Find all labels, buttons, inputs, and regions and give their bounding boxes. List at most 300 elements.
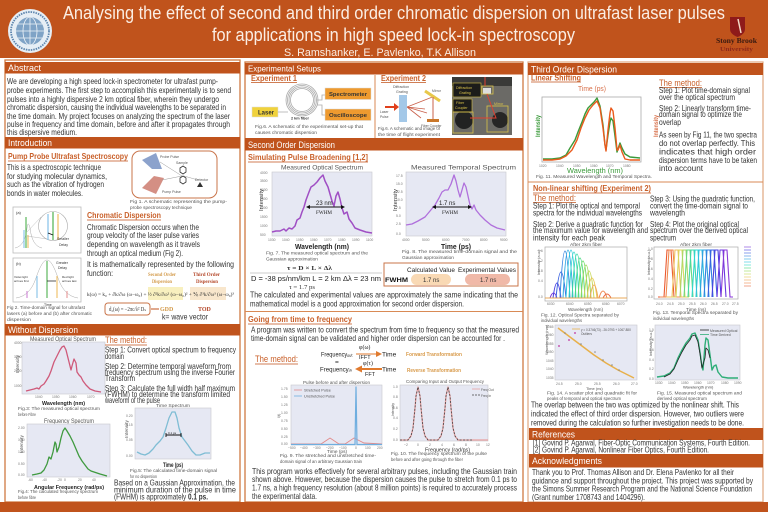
pump probe text: This is a spectroscopic technique xyxy=(7,163,101,172)
figure 9: pulse before and after dispersion: 0.50 xyxy=(281,427,288,431)
gaussian approximation text xyxy=(114,478,236,502)
panel: middle column xyxy=(245,62,523,502)
heading: acknowledgments: Acknowledgments xyxy=(532,456,602,467)
figure 13: temporal spectra per wavelength: 0.4 xyxy=(648,277,653,281)
figure 3 caption xyxy=(18,406,100,418)
figure 2b: greater delay: Violet light xyxy=(14,275,28,279)
figure 2 caption: lasers (a) before and (b) after chromatic xyxy=(7,311,93,317)
panel: right column xyxy=(528,62,763,502)
figure 7 caption: Gaussian approximation xyxy=(266,256,318,262)
figure 8: temporal spectrum with FWHM: 5000 xyxy=(422,238,430,242)
caption: Fig.6. A schematic of the experimental set-up that xyxy=(255,124,364,130)
figure 8 caption xyxy=(402,249,517,261)
figure 10: comparing input and output frequency: Freq In xyxy=(481,394,491,398)
figure 7: optical spectrum with FWHM: 1040 xyxy=(282,238,290,242)
figure 13 caption xyxy=(653,310,739,322)
subheading: non-linear shifting: Non-linear shifting (Experiment 2) xyxy=(533,184,651,193)
linear shifting steps: domain signal to optimize the xyxy=(659,110,742,119)
abstract text: pulse in frequency and time domain, before and after it propagates through xyxy=(7,120,230,129)
figure 11: wavelength and temporal spectra: 1020 xyxy=(539,164,547,168)
figure 4: frequency spectrum: 0.50 xyxy=(18,462,25,466)
figure 8: temporal spectrum with FWHM: FWHM xyxy=(442,210,458,216)
experiment 2 diagram: Diffraction xyxy=(393,85,409,89)
figure 13: temporal spectra per wavelength: 26.0 xyxy=(700,302,707,306)
experiment 2 diagram: Grating xyxy=(396,90,408,94)
experiment 2 diagram: Fiber Coupler xyxy=(421,124,442,128)
figure 11: wavelength and temporal spectra: Time (ps) xyxy=(578,86,606,93)
pump probe text xyxy=(7,163,107,198)
figure 8: temporal spectrum with FWHM: 6000 xyxy=(442,238,450,242)
figure 14: quadratic fit: 1040 xyxy=(546,367,554,371)
figure 2b: greater delay: Greater xyxy=(56,261,69,265)
figure 12: optical spectra per wavelength: 6070 xyxy=(617,302,625,306)
figure 15: measured and derived spectrum: Time Derived xyxy=(710,333,731,337)
figure 9: pulse before and after dispersion: Pulse before and after dispersion xyxy=(303,380,370,386)
figure 14: quadratic fit: 1060 xyxy=(546,333,554,337)
figure 5: time spectrum: 0.00 xyxy=(126,454,133,458)
acknowledgments text xyxy=(532,468,754,502)
experimental pill: 1.7 ns xyxy=(480,278,496,284)
transformation diagram: Time xyxy=(382,366,397,374)
figure 13: temporal spectra per wavelength: 27.0 xyxy=(722,302,729,306)
non-linear steps right: spectrum over the derived optical xyxy=(650,226,748,235)
figure 1 caption: Fig 1. A schematic representing the pump- xyxy=(130,199,227,205)
the method heading: The method: xyxy=(533,193,576,204)
heading: references: References xyxy=(532,430,575,440)
figure 3: measured optical spectrum: 2000 xyxy=(14,369,22,373)
transformation diagram: Time xyxy=(382,352,397,358)
equation: dispersion series: Dispersion xyxy=(152,279,172,285)
figure 15: measured and derived spectrum xyxy=(648,325,742,390)
figure 10: comparing input and output frequency: 1.0 xyxy=(393,385,398,389)
figure 7: optical spectrum with FWHM: 1000 xyxy=(260,224,268,228)
figure 4: frequency spectrum: -40 xyxy=(42,478,47,482)
nonlinear conclusion text xyxy=(531,400,744,428)
spectrometer box: Spectrometer xyxy=(329,92,368,98)
figure 10: comparing input and output frequency: 2 xyxy=(429,443,431,447)
figure 9: pulse before and after dispersion: I(t) xyxy=(277,414,281,418)
icon: university seal xyxy=(8,9,52,53)
figure 12: optical spectra per wavelength: 6060 xyxy=(602,302,610,306)
figure 2b: greater delay: Delay xyxy=(58,266,67,270)
figure 10: comparing input and output frequency: 8 xyxy=(465,443,467,447)
abstract text: this dispersive medium. xyxy=(7,128,77,137)
figure 10: comparing input and output frequency: 0.4 xyxy=(393,416,398,420)
figure 10 caption: Fig. 10. The frequency spectrum of the pulse xyxy=(391,451,487,457)
program results text: 1.7 ns, a high frequency resolution (about 8 million points) is required to accurately process xyxy=(252,484,517,492)
figure 13: temporal spectra per wavelength: 0.2 xyxy=(648,287,653,291)
photo of experiment xyxy=(452,77,512,135)
method steps: Step 2: Determine temporal waveform from xyxy=(105,362,231,371)
figure 4: frequency spectrum: 0.00 xyxy=(18,473,25,477)
non-linear steps left: spectra for the individual wavelengths xyxy=(533,208,642,218)
figure 10: comparing input and output frequency: Comparing Input and Output Frequency xyxy=(406,379,485,385)
figure 15: measured and derived spectrum: 1060 xyxy=(694,381,702,385)
figure 12: optical spectra per wavelength: 6050 xyxy=(584,302,592,306)
figure 3: measured optical spectrum xyxy=(14,337,105,407)
figure 4: frequency spectrum: -20 xyxy=(57,478,62,482)
figure 14: quadratic fit: 1050 xyxy=(546,350,554,354)
figure 13 caption: individual wavelengths xyxy=(653,316,695,322)
figure 10: comparing input and output frequency: −2 xyxy=(404,443,408,447)
equation block: D = -38 ps/nm/km L = 2 km Δλ = 23 nm xyxy=(251,276,381,283)
icon: Stony Brook logo: Stony Brook xyxy=(716,36,758,45)
abstract text: We are developing a high speed lock-in spectrometer for ultrafast pump- xyxy=(7,77,218,86)
figure 13: temporal spectra per wavelength: 0.6 xyxy=(648,267,653,271)
transformation diagram: φ(τ) xyxy=(363,360,373,367)
linear shifting steps: into account xyxy=(659,164,704,173)
figure 4: frequency spectrum: 1.50 xyxy=(18,438,25,442)
figure 14: quadratic fit: 25.0 xyxy=(575,382,582,386)
subheading: chromatic dispersion: Chromatic Dispersion xyxy=(87,211,161,220)
equation: dispersion series xyxy=(87,272,234,300)
header banner xyxy=(0,0,768,59)
figure 15 caption: Fig. 15. Measured optical spectrum and xyxy=(657,390,742,396)
figure 10: comparing input and output frequency: 12 xyxy=(486,443,490,447)
figure 8: temporal spectrum with FWHM: 9000 xyxy=(500,238,508,242)
figure 11: wavelength and temporal spectra: 1050 xyxy=(573,164,581,168)
equation: dispersion series: Third Order xyxy=(193,272,221,278)
figure 8: temporal spectrum with FWHM: 8000 xyxy=(480,238,488,242)
figure 14: quadratic fit: 1065 xyxy=(546,325,554,329)
figure 7: optical spectrum with FWHM: Measured Optical Spectrum xyxy=(281,166,363,172)
figure 9: pulse before and after dispersion: 0.75 xyxy=(281,419,288,423)
experiment 2 diagram: Pulse xyxy=(380,115,389,119)
figure 13: temporal spectra per wavelength: 24.0 xyxy=(656,302,663,306)
figure 8: temporal spectrum with FWHM: 15.0 xyxy=(396,182,403,186)
linear shifting steps: do not overlap perfectly. This xyxy=(659,139,755,148)
figure 8: temporal spectrum with FWHM: 4000 xyxy=(402,238,410,242)
figure 9: pulse before and after dispersion: Unstretched Pulse xyxy=(304,394,335,398)
figure 10: comparing input and output frequency: 0.6 xyxy=(393,406,398,410)
figure 15: measured and derived spectrum: 0.4 xyxy=(649,358,654,362)
figure 14: quadratic fit xyxy=(544,324,638,391)
non-linear steps left: Step 2: Derive a quadratic function for xyxy=(533,220,643,229)
figure 2b: greater delay: Time xyxy=(44,303,52,307)
transformation diagram: Frequencyₒᵤₜ xyxy=(321,352,353,358)
figure 4: frequency spectrum: Frequency Spectrum xyxy=(44,419,94,425)
figure 14 caption: peaks of temporal and optical spectrum xyxy=(547,396,621,402)
transformation diagram: = xyxy=(335,359,339,366)
the method heading: The method: xyxy=(105,335,147,346)
figure 5 caption xyxy=(130,468,217,480)
figure 11: wavelength and temporal spectra xyxy=(536,86,660,175)
heading: third order dispersion: Third Order Dispersion xyxy=(531,64,617,76)
linear shifting steps: indicates that high order xyxy=(659,148,756,156)
figure 9: pulse before and after dispersion: 0.25 xyxy=(281,435,288,439)
method steps: Step 1: Convert optical spectrum to frequency xyxy=(105,346,237,354)
figure 11: wavelength and temporal spectra: 1080 xyxy=(623,164,631,168)
method steps: domain xyxy=(105,352,124,361)
heading: third order dispersion xyxy=(528,63,763,76)
figure 7: optical spectrum with FWHM: 3500 xyxy=(260,179,268,183)
subheading: simulating pulse broadening: Simulating Pulse Broadening [1,2] xyxy=(248,153,368,162)
experiment 1 diagram: 2 km fiber xyxy=(291,116,309,120)
heading: second order dispersion: Second Order Dispersion xyxy=(248,140,335,151)
figure 13: temporal spectra per wavelength: After 2km fiber xyxy=(680,242,712,248)
figure 3: measured optical spectrum: Intensity xyxy=(15,355,21,373)
linear shifting steps xyxy=(659,86,757,173)
figure 13: temporal spectra per wavelength: 24.5 xyxy=(667,302,674,306)
figure 14: quadratic fit: Wavelength (nm) xyxy=(544,324,549,355)
experiment 2 diagram: the time of flight experiment xyxy=(378,132,441,138)
figure 14: quadratic fit: Time (ns) xyxy=(586,386,603,391)
pump probe text: bonds in water molecules. xyxy=(7,189,83,198)
figure 7: optical spectrum with FWHM: 500 xyxy=(260,233,266,237)
equation: dispersion series: Dispersion xyxy=(196,279,218,285)
figure 15: measured and derived spectrum: Intensity (a.u.) xyxy=(648,330,653,356)
figure 15 caption: derived optical spectrum xyxy=(657,396,707,402)
figure 13: temporal spectra per wavelength: 27.5 xyxy=(732,302,739,306)
figure 7: optical spectrum with FWHM: 2000 xyxy=(260,206,268,210)
figure 12: optical spectra per wavelength: Intensity (a.u.) xyxy=(536,249,541,275)
method steps: frequency spectrum using the inverse Fourier xyxy=(105,368,235,377)
non-linear steps left: intensity for each peak xyxy=(533,234,606,242)
equation block: τ = D × L × Δλ xyxy=(287,265,333,272)
figure 2b: greater delay xyxy=(13,258,81,307)
figure 8: temporal spectrum with FWHM: 0.0 xyxy=(396,232,401,236)
figure 9: pulse before and after dispersion xyxy=(277,380,383,450)
figure 9: pulse before and after dispersion: 0 xyxy=(355,446,357,450)
figure 15: measured and derived spectrum: 0.2 xyxy=(649,367,654,371)
figure 2 caption: dispersion xyxy=(7,317,31,323)
figure 2a: small delay: Smaller xyxy=(57,237,70,241)
figure 14: quadratic fit: 26.0 xyxy=(613,382,620,386)
figure 7: optical spectrum with FWHM: 1050 xyxy=(296,238,304,242)
figure 8: temporal spectrum with FWHM xyxy=(393,166,516,251)
figure 2b: greater delay: Red light xyxy=(62,275,74,279)
figure 9: pulse before and after dispersion: 1.50 xyxy=(281,395,288,399)
heading: without dispersion: Without Dispersion xyxy=(8,325,78,336)
figure 5: time spectrum: Intensity xyxy=(124,420,130,438)
figure 15: measured and derived spectrum: 1030 xyxy=(655,381,663,385)
figure 13: temporal spectra per wavelength: 25.0 xyxy=(678,302,685,306)
gaussian approximation text: minimum duration of the pulse in time xyxy=(114,486,236,494)
figure 13: temporal spectra per wavelength: 0.0 xyxy=(648,295,653,299)
non-linear steps right: wavelength xyxy=(649,208,685,218)
table: calculated vs experimental: Calculated Value xyxy=(407,267,455,274)
figure 10: comparing input and output frequency: 0.2 xyxy=(393,427,398,431)
figure 11 caption: Fig. 11. Measured Wavelength and Temporal Spectra. xyxy=(536,174,652,180)
figure 4: frequency spectrum: 1.00 xyxy=(18,450,25,454)
heading: experimental setups xyxy=(245,63,523,74)
figure 5: time spectrum: 0.20 xyxy=(126,414,133,418)
equation block: τ = 1.7 ps xyxy=(289,284,315,291)
figure 15: measured and derived spectrum: 0.8 xyxy=(649,338,654,342)
photo of experiment: Coupler xyxy=(455,106,468,110)
figure 1 caption xyxy=(130,199,227,211)
non-linear steps right: convert the time-domain signal to xyxy=(650,202,748,210)
figure 5: time spectrum xyxy=(124,403,211,469)
pump probe text: for studying molecular dynamics, xyxy=(7,172,107,181)
figure 8 caption: Fig. 8. The measured time-domain signal and the xyxy=(402,249,517,255)
figure 3: measured optical spectrum: 1060 xyxy=(69,395,77,399)
table: calculated vs experimental xyxy=(384,263,518,286)
figure 7: optical spectrum with FWHM: 1030 xyxy=(268,238,276,242)
figure 7: optical spectrum with FWHM: Wavelength (nm) xyxy=(295,244,349,251)
chromatic dispersion text: It is mathematically represented by the following xyxy=(87,260,234,269)
heading: introduction: Introduction xyxy=(8,138,52,149)
transformation diagram: φ(ω) xyxy=(359,344,370,351)
figure 14: quadratic fit: 25.5 xyxy=(594,382,601,386)
experiment 1 diagram: Experiment 1 xyxy=(251,74,297,83)
figure 3 caption: Fig.3: The measured optical spectrum xyxy=(18,406,100,412)
figure 8: temporal spectrum with FWHM: 12.5 xyxy=(396,190,403,194)
caption xyxy=(255,124,364,136)
transformation diagram: FFT xyxy=(365,372,376,378)
photo of experiment: Grating xyxy=(459,91,471,95)
label: forward transformation: Forward Transformation xyxy=(406,352,462,358)
figure 11: wavelength and temporal spectra: Wavelength (nm) xyxy=(567,168,623,175)
figure 15: measured and derived spectrum: 1090 xyxy=(734,381,742,385)
method steps: waveform of the pulse xyxy=(104,396,160,405)
heading: second order dispersion xyxy=(245,138,523,151)
figure 14: quadratic fit: 24.5 xyxy=(556,382,563,386)
figure 10: comparing input and output frequency: Intensity xyxy=(391,403,395,416)
label: reverse transformation: Reverse Transformation xyxy=(407,368,461,374)
table: calculated vs experimental: Experimental Values xyxy=(458,267,517,274)
references list: [2] Govind P. Agarwal, Nonlinear Fiber Optics, Fourth Edition. xyxy=(533,446,709,454)
figure 4: frequency spectrum: Intensity xyxy=(19,435,25,453)
linear shifting steps: overlap xyxy=(659,118,681,127)
transformation diagram xyxy=(320,344,397,378)
figure 9: pulse before and after dispersion: 1.75 xyxy=(281,387,288,391)
figure 7: optical spectrum with FWHM: 3000 xyxy=(260,188,268,192)
figure 8: temporal spectrum with FWHM: 7000 xyxy=(462,238,470,242)
figure 7: optical spectrum with FWHM: 1090 xyxy=(352,238,360,242)
figure 11: wavelength and temporal spectra: Intensity xyxy=(654,114,660,137)
figure 10: comparing input and output frequency: 10 xyxy=(476,443,480,447)
figure 8: temporal spectrum with FWHM: 17.5 xyxy=(396,174,403,178)
figure 10: comparing input and output frequency: 6 xyxy=(453,443,455,447)
figure 13: temporal spectra per wavelength: 1.0 xyxy=(648,247,653,251)
label: TOD: TOD xyxy=(198,307,212,313)
figure 8: temporal spectrum with FWHM: 7.5 xyxy=(396,206,401,210)
figure 15: measured and derived spectrum: 1050 xyxy=(681,381,689,385)
figure 2b: greater delay: arrives last xyxy=(62,279,77,283)
figure 7: optical spectrum with FWHM: 1060 xyxy=(310,238,318,242)
figure 12 caption: individual wavelengths xyxy=(541,318,583,324)
non-linear steps left: the maximum value for wavelength and xyxy=(533,226,648,235)
figure 12 caption xyxy=(541,312,620,324)
figure 4: frequency spectrum: 40 xyxy=(92,478,96,482)
arrow: forward xyxy=(356,351,382,357)
figure 7: optical spectrum with FWHM: 1080 xyxy=(338,238,346,242)
figure 3: measured optical spectrum: Wavelength (nm) xyxy=(42,401,85,407)
figure 14 caption: Fig. 14. A scatter plot and quadratic fit for xyxy=(547,390,637,396)
non-linear steps right xyxy=(649,194,755,242)
figure 7: optical spectrum with FWHM: 1500 xyxy=(260,215,268,219)
figure 9: pulse before and after dispersion: 200 xyxy=(377,446,383,450)
label: GDD: GDD xyxy=(160,307,174,313)
figure 9: pulse before and after dispersion: 1.00 xyxy=(281,411,288,415)
figure 7: optical spectrum with FWHM: 4000 xyxy=(260,171,268,175)
transformation diagram: Frequencyᵢₙ xyxy=(320,366,352,374)
figure 1: pump probe schematic: Probe Pulse xyxy=(160,155,179,159)
figure 10: comparing input and output frequency: Frequency (rad/ps) xyxy=(425,448,470,454)
figure 5: time spectrum: 0.1 ps xyxy=(168,431,177,435)
figure 9: pulse before and after dispersion: −500 xyxy=(288,446,296,450)
subheading: linear shifting: Linear Shifting xyxy=(531,74,581,82)
experiment 1 diagram xyxy=(251,74,371,136)
figure 5: time spectrum: Time (ps) xyxy=(163,463,183,469)
figure 13: temporal spectra per wavelength: Intensity (a.u.) xyxy=(646,249,651,275)
heading: introduction xyxy=(5,137,240,149)
abstract text xyxy=(7,77,231,137)
method steps: Step 3: Calculate the full width half maximum xyxy=(105,384,235,393)
figure 12: optical spectra per wavelength: 6030 xyxy=(547,302,555,306)
chromatic dispersion text: depending on wavelength as it travels xyxy=(87,240,200,249)
non-linear steps right: Step 4: Plot the original optical xyxy=(650,220,739,229)
figure 13: temporal spectra per wavelength: 25.5 xyxy=(689,302,696,306)
chromatic dispersion text xyxy=(87,223,234,278)
acknowledgments text: (Grant number 1708743 and 1404296). xyxy=(532,493,645,502)
figure 12: optical spectra per wavelength: 1.6 xyxy=(538,249,543,253)
photo of experiment: Mirror xyxy=(494,102,504,106)
the method heading: The method: xyxy=(659,78,702,89)
transformation diagram: IFFT xyxy=(359,355,371,361)
figure 15 caption xyxy=(657,390,742,402)
icon: Stony Brook logo: University xyxy=(720,46,754,53)
chromatic dispersion text: through an optical medium (Fig 2). xyxy=(87,249,183,258)
figure 15: measured and derived spectrum: 1070 xyxy=(707,381,715,385)
figure 5 caption: Fig.5: The calculated time-domain signal xyxy=(130,468,217,474)
figure 3: measured optical spectrum: 1000 xyxy=(14,384,22,388)
figure 12: optical spectra per wavelength: 6040 xyxy=(566,302,574,306)
figure 12 caption: Fig. 12. Optical Spectra separated by xyxy=(541,312,620,318)
figure 9: pulse before and after dispersion: 100 xyxy=(365,446,371,450)
figure 14: quadratic fit: y = 0.3746(73) - 26.0793 + 1067.88X xyxy=(581,328,632,332)
figure 9: pulse before and after dispersion: Stretched Pulse xyxy=(304,388,331,392)
gaussian approximation text: Based on a Gaussian Approximation, the xyxy=(114,478,235,488)
figure 13: temporal spectra per wavelength: Time (ns) xyxy=(686,307,706,313)
figure 7 caption xyxy=(266,250,368,262)
figure 7: optical spectrum with FWHM: 2500 xyxy=(260,197,268,201)
figure 9: pulse before and after dispersion: −400 xyxy=(300,446,308,450)
experiment 2 diagram xyxy=(378,74,442,138)
figure 7: optical spectrum with FWHM: FWHM xyxy=(316,210,332,216)
figure 12: optical spectra per wavelength: 0.8 xyxy=(538,269,543,273)
figure 9 caption xyxy=(280,449,376,465)
figure 1: pump probe schematic xyxy=(132,151,217,198)
figure 1: pump probe schematic: Pump Pulse xyxy=(162,190,181,194)
figure 15: measured and derived spectrum: 0.6 xyxy=(649,348,654,352)
table: calculated vs experimental: FWHM xyxy=(385,277,408,284)
figure 14: quadratic fit: 1035 xyxy=(546,376,554,380)
figure 2b: greater delay: (b) xyxy=(16,261,22,266)
figure 4: frequency spectrum: 2.00 xyxy=(18,426,25,430)
conclusion text xyxy=(250,290,518,308)
figure 8: temporal spectrum with FWHM: 1.7 ns xyxy=(439,201,455,207)
figure 8 caption: Gaussian approximation xyxy=(402,255,454,261)
figure 12: optical spectra per wavelength: 0.4 xyxy=(538,279,543,283)
figure 10: comparing input and output frequency: 4 xyxy=(441,443,443,447)
figure 8: temporal spectrum with FWHM: 10.0 xyxy=(396,198,403,202)
panel: left column xyxy=(5,60,240,502)
subheading: going from time to frequency: Going from time to frequency xyxy=(248,315,352,324)
figure 2b: greater delay: arrives first xyxy=(14,279,29,283)
heading: experimental setups: Experimental Setups xyxy=(248,64,321,74)
figure 5: time spectrum: 0.15 xyxy=(126,423,133,427)
icon: Stony Brook logo xyxy=(716,17,758,53)
non-linear steps left xyxy=(533,202,648,242)
method steps xyxy=(104,346,237,405)
arrow: reverse xyxy=(355,366,382,372)
figure 7: optical spectrum with FWHM: Intensity xyxy=(259,189,265,211)
figure 4 caption: before fibre xyxy=(18,495,36,501)
figure 2a: small delay xyxy=(13,207,81,253)
program text: time-domain signal can be validated and higher order dispersion can be accounted for . xyxy=(251,334,505,343)
